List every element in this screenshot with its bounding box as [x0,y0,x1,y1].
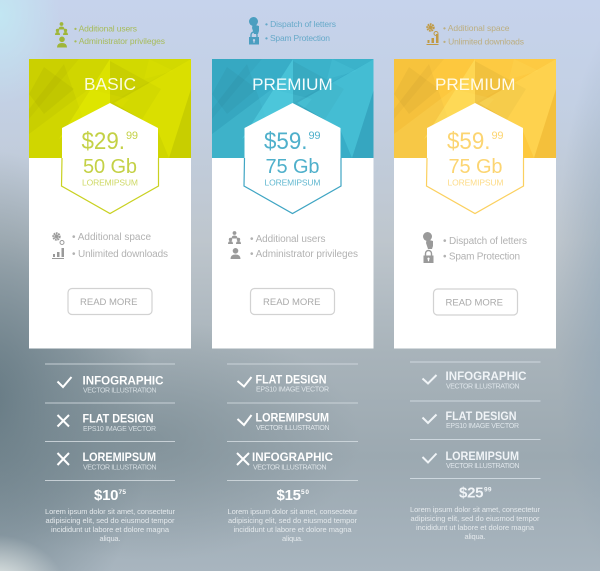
icon: check [422,454,436,462]
button: read more [68,288,152,314]
feature list: • Additional users [250,234,326,245]
header band [394,59,556,158]
button: read more: READ MORE [80,297,138,308]
list: additional users, administrator privileges: • Administrator privileges [74,36,165,46]
list: additional space, unlimited downloads [443,23,524,46]
description: Lorem ipsum dolor sit amet, consectetur [45,507,176,516]
row: flat design: FLAT DESIGN [256,372,326,386]
description: aliqua. [100,534,120,543]
row: flat design [446,409,519,430]
header band [29,59,191,158]
plan title: PREMIUM [252,75,333,94]
price: 99 [492,130,504,142]
icon: cross [58,415,69,426]
feature list: • Unlimited downloads [72,249,168,260]
feature list: • Administrator privileges [250,249,358,260]
row: flat design: EPS10 IMAGE VECTOR [83,426,156,433]
description: aliqua. [282,534,303,543]
icon: users [55,22,68,35]
description: incididunt ut labore et dolore magna [234,525,352,534]
row: loremipsum: LOREMIPSUM [446,449,519,463]
icon: cross [58,453,69,465]
list: additional users, administrator privileges: • Additional users [74,24,137,34]
row: loremipsum [446,449,520,470]
top features: basic [55,22,165,48]
description: Lorem ipsum dolor sit amet, consectetur [228,507,358,516]
button: read more: READ MORE [263,297,320,308]
panel: basic [29,59,191,348]
plan title: BASIC [84,74,136,94]
row: loremipsum: LOREMIPSUM [256,411,329,425]
row: infographic [82,373,164,394]
row: loremipsum: LOREMIPSUM [82,450,156,464]
icon: gear [428,24,438,36]
storage: 75 Gb [266,156,320,178]
list: additional users, administrator privileges [74,24,165,46]
list: dispatch, spam [265,19,336,43]
price: $15 [276,487,301,504]
row: infographic: INFOGRAPHIC [252,450,333,464]
icon: check [422,414,436,423]
hexagon outline [244,158,341,214]
comparison list: basic [45,364,176,543]
feature list [250,234,358,260]
comparison list: premium yellow [410,362,540,541]
price: $10 [94,487,118,504]
icon: admin [57,36,67,48]
button: read more [250,288,334,314]
list: dispatch, spam: • Spam Protection [265,33,330,43]
button: read more: READ MORE [446,298,503,308]
list: dispatch, spam: • Dispatch of letters [265,19,336,29]
icon: check [422,375,436,384]
icon: gear [54,234,64,244]
icon: bars [426,34,438,45]
description [228,507,358,543]
description: Lorem ipsum dolor sit amet, consectetur [410,505,540,514]
row: infographic [446,369,527,390]
header band [212,59,374,158]
description: adipisicing elit, sed do eiusmod tempor [228,516,358,525]
price: $59. [264,128,308,155]
row: infographic: VECTOR ILLUSTRATION [253,464,326,472]
caption: LOREMIPSUM [82,178,138,188]
row: infographic: VECTOR ILLUSTRATION [83,388,156,394]
price: $25 [459,485,484,502]
row: flat design: EPS10 IMAGE VECTOR [446,423,519,430]
description: incididunt ut labore et dolore magna [51,525,170,534]
row: flat design [82,412,156,433]
row: infographic: VECTOR ILLUSTRATION [446,384,520,390]
icon: users [228,231,241,244]
top features: premium yellow [426,23,524,46]
row: loremipsum: VECTOR ILLUSTRATION [83,464,156,472]
row: flat design [256,372,329,394]
price: 50 [301,489,309,496]
description: aliqua. [464,532,486,541]
description: adipisicing elit, sed do eiusmod tempor [46,516,175,525]
hexagon outline [62,158,158,214]
icon: check [238,415,252,425]
price: 99 [308,130,320,142]
icon: cross [237,453,249,465]
storage: 50 Gb [83,156,137,178]
row: loremipsum: VECTOR ILLUSTRATION [446,463,520,470]
icon: lock [249,32,259,44]
button: read more [434,289,518,315]
hexagon outline [426,158,524,214]
description [410,505,540,541]
comparison list: premium blue [227,364,358,543]
icon: lock [424,250,434,263]
feature list [443,236,527,262]
price: $29. [82,128,125,155]
icon: check [58,377,72,387]
hexagon price badge [427,103,523,214]
list: additional space, unlimited downloads: • Additional space [443,23,510,33]
description: adipisicing elit, sed do eiusmod tempor [410,514,540,523]
description: incididunt ut labore et dolore magna [416,523,535,532]
feature list [72,232,168,260]
panel: premium blue [212,59,374,348]
plan title: PREMIUM [435,75,516,94]
hexagon price badge [62,103,158,214]
row: flat design: FLAT DESIGN [82,412,154,426]
row: flat design: EPS10 IMAGE VECTOR [256,387,329,394]
price: $59. [447,128,490,155]
caption: LOREMIPSUM [264,178,320,188]
price: 99 [126,130,138,142]
price: 99 [484,487,492,494]
row: infographic: INFOGRAPHIC [446,369,527,383]
feature list: • Spam Protection [443,252,520,262]
panel: premium yellow [394,59,556,348]
top features: premium blue [249,17,336,44]
caption: LOREMIPSUM [448,178,504,188]
icon: admin [230,248,240,259]
feature list: • Additional space [72,232,151,243]
hexagon price badge [244,103,340,214]
icon: hand [423,232,433,249]
row: loremipsum [82,450,156,472]
row: loremipsum [256,411,330,432]
storage: 75 Gb [448,156,502,178]
description [45,507,176,543]
row: infographic: INFOGRAPHIC [82,373,164,387]
icon: bars [52,248,64,259]
row: loremipsum: VECTOR ILLUSTRATION [256,425,330,432]
price: 75 [118,489,126,496]
row: flat design: FLAT DESIGN [446,409,516,423]
row: infographic [252,450,333,472]
icon: check [238,377,252,386]
list: additional space, unlimited downloads: • Unlimited downloads [443,36,524,46]
feature list: • Dispatch of letters [443,236,527,247]
icon: hand [249,17,259,34]
